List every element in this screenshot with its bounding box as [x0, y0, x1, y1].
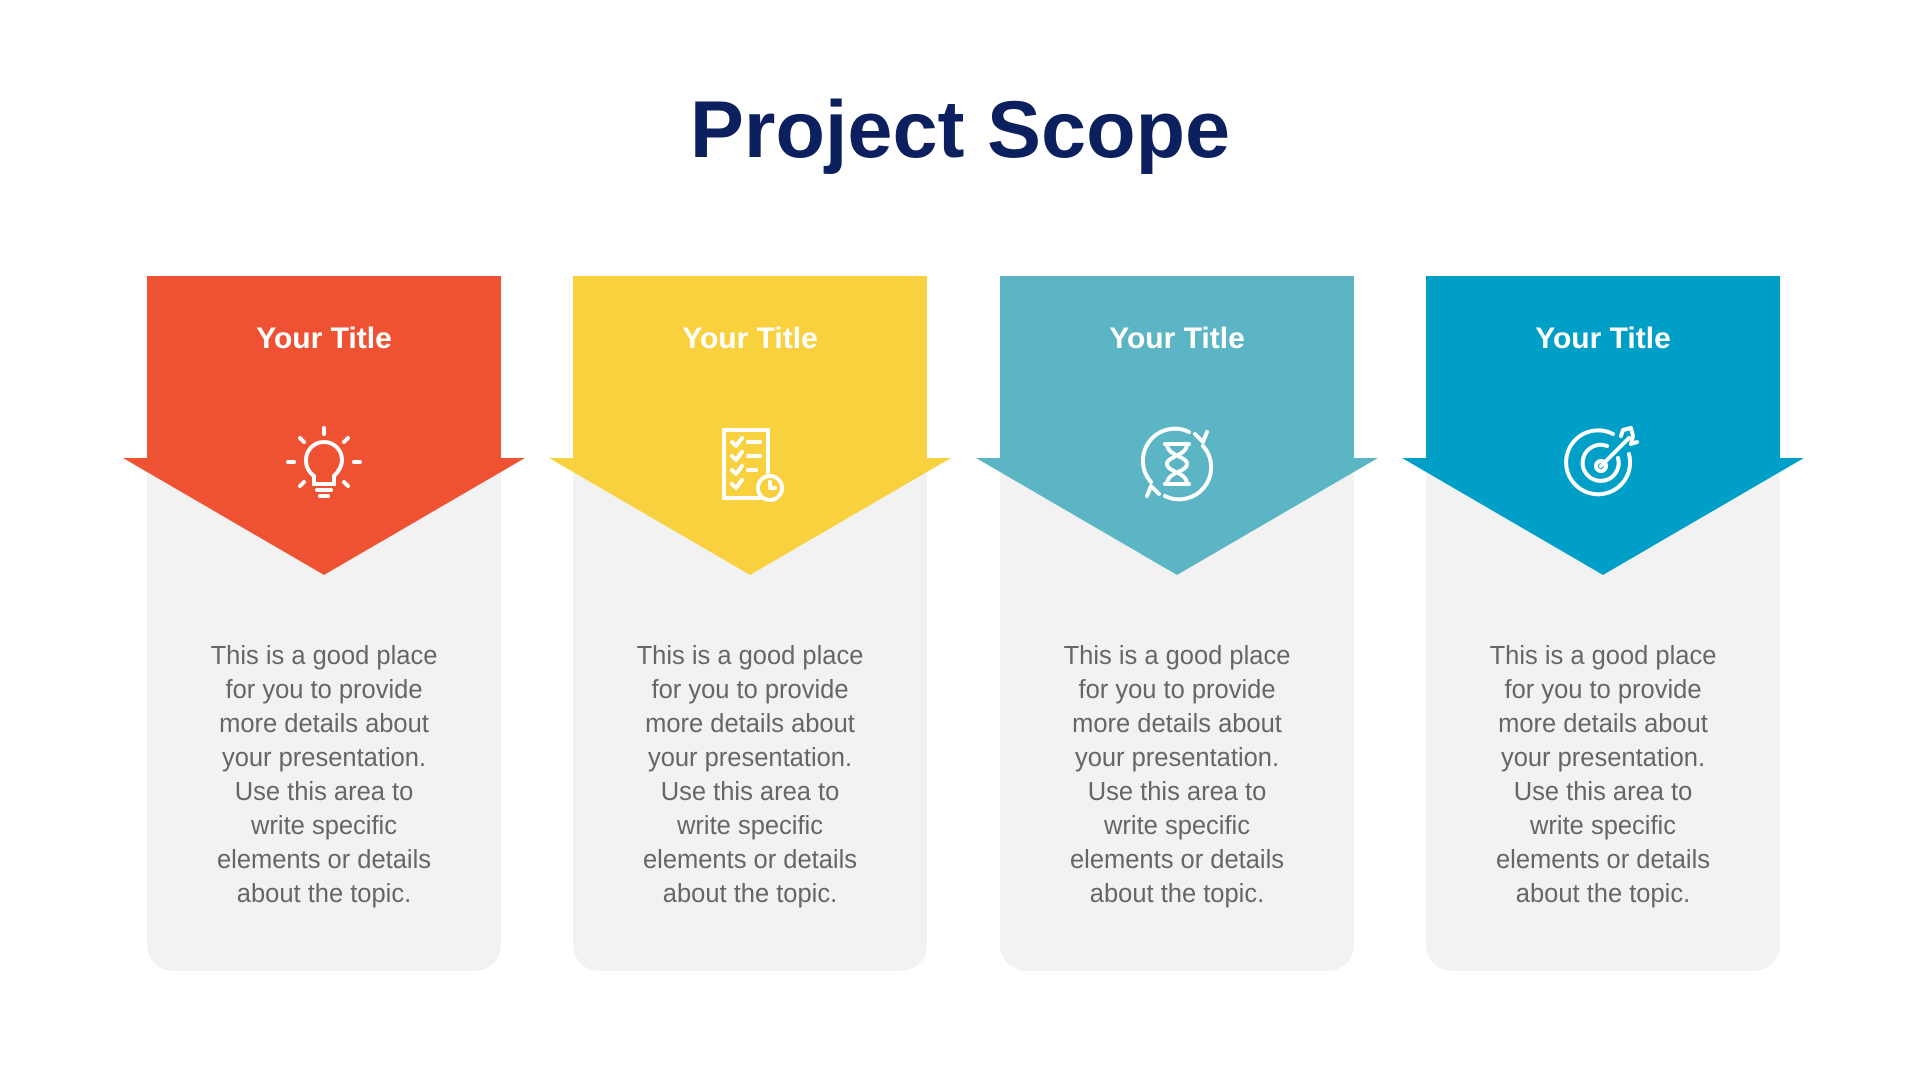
text 4: your presentation. — [1501, 744, 1705, 772]
text 1: more details about — [219, 710, 429, 738]
arrow header 2 — [549, 276, 951, 575]
heading 3: Your Title — [1109, 322, 1245, 355]
text 3 — [1064, 642, 1290, 908]
panel: card 4 — [1402, 276, 1804, 971]
text 2: your presentation. — [648, 744, 852, 772]
text 1: for you to provide — [225, 676, 423, 704]
text 1: elements or details — [217, 846, 431, 874]
text 4: for you to provide — [1504, 676, 1702, 704]
text 2: about the topic. — [663, 880, 837, 908]
text 4: more details about — [1498, 710, 1708, 738]
panel: card 3 — [976, 276, 1378, 971]
text 2: Use this area to — [661, 778, 839, 806]
icon: light bulb — [286, 426, 362, 498]
text 4: Use this area to — [1514, 778, 1692, 806]
text 3: for you to provide — [1078, 676, 1276, 704]
text 2: for you to provide — [651, 676, 849, 704]
text 3: your presentation. — [1075, 744, 1279, 772]
heading 4: Your Title — [1535, 322, 1671, 355]
text 1: your presentation. — [222, 744, 426, 772]
text 4 — [1490, 642, 1716, 908]
arrow header 4 — [1402, 276, 1804, 575]
text 2: more details about — [645, 710, 855, 738]
text 3: This is a good place — [1064, 642, 1290, 670]
icon: hourglass cycle — [1140, 426, 1214, 502]
icon: target — [1564, 426, 1640, 496]
text 1: This is a good place — [211, 642, 437, 670]
text 1: Use this area to — [235, 778, 413, 806]
heading 1: Your Title — [256, 322, 392, 355]
text 4: This is a good place — [1490, 642, 1716, 670]
text 3: Use this area to — [1088, 778, 1266, 806]
heading 2: Your Title — [682, 322, 818, 355]
text 2: elements or details — [643, 846, 857, 874]
text 4: elements or details — [1496, 846, 1710, 874]
icon: checklist — [722, 428, 784, 502]
text 1 — [211, 642, 437, 908]
text 2: This is a good place — [637, 642, 863, 670]
arrow header 1 — [123, 276, 525, 575]
text 3: elements or details — [1070, 846, 1284, 874]
arrow header 3 — [976, 276, 1378, 575]
text 4: write specific — [1530, 812, 1676, 840]
text 3: about the topic. — [1090, 880, 1264, 908]
text 3: more details about — [1072, 710, 1282, 738]
text 2: write specific — [677, 812, 823, 840]
text 3: write specific — [1104, 812, 1250, 840]
text 1: about the topic. — [237, 880, 411, 908]
text 2 — [637, 642, 863, 908]
title: Project Scope — [690, 85, 1230, 175]
text 4: about the topic. — [1516, 880, 1690, 908]
panel: card 1 — [123, 276, 525, 971]
panel: card 2 — [549, 276, 951, 971]
text 1: write specific — [251, 812, 397, 840]
